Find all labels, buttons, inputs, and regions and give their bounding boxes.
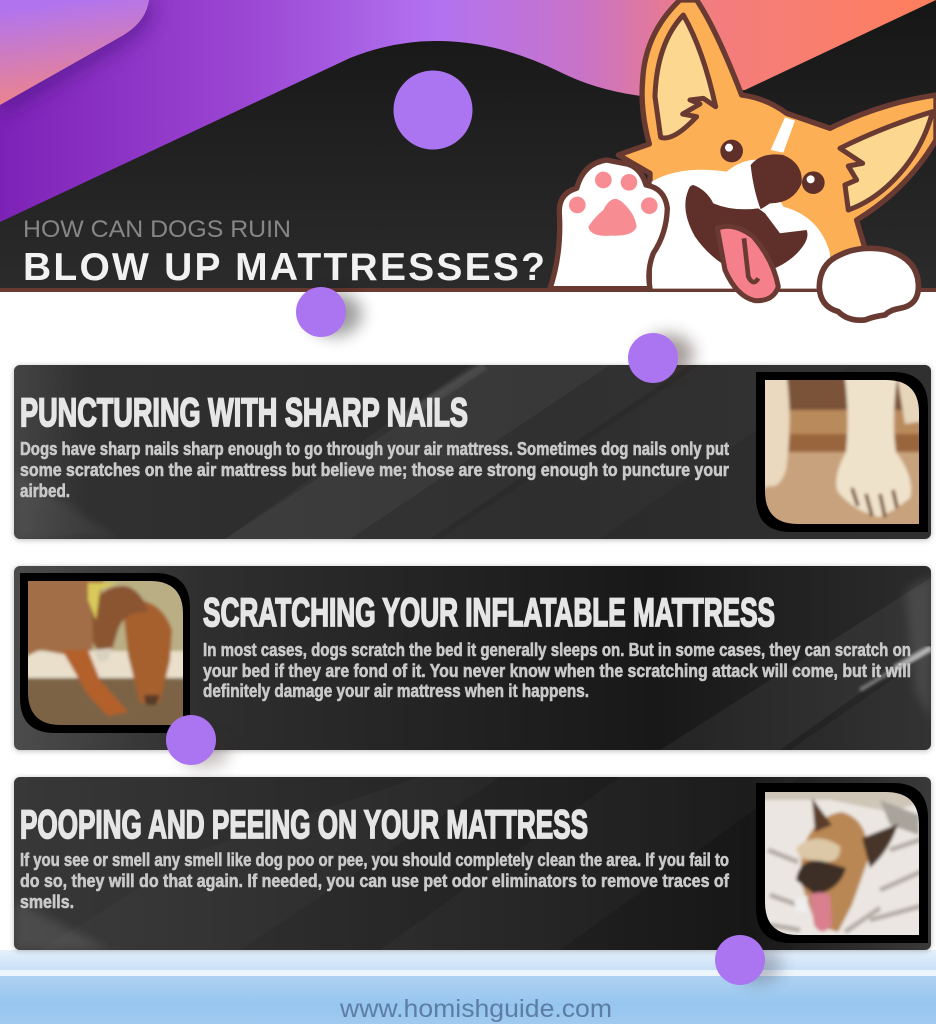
header banner bbox=[0, 0, 936, 292]
footer band bbox=[0, 950, 936, 1024]
corgi mouth bbox=[685, 185, 807, 277]
corgi left ear bbox=[655, 15, 716, 138]
body text: do so, they will do that again. If needed, you can use pet odor eliminators to remove traces of bbox=[20, 871, 730, 891]
body text: Dogs have sharp nails sharp enough to go through your air mattress. Sometimes dog nails only put bbox=[20, 439, 729, 459]
purple dot: under title bbox=[296, 287, 362, 337]
panel: pooping and peeing on your mattress bbox=[14, 777, 931, 951]
corgi right ear bbox=[840, 112, 933, 210]
corner gradient ribbon bbox=[0, 0, 149, 105]
title: BLOW UP MATTRESSES? bbox=[23, 246, 545, 289]
body text: airbed. bbox=[20, 481, 70, 501]
panel: puncturing with sharp nails bbox=[14, 365, 931, 540]
corgi raised paw bbox=[550, 160, 667, 289]
heading: POOPING AND PEEING ON YOUR MATTRESS bbox=[20, 803, 588, 847]
heading: PUNCTURING WITH SHARP NAILS bbox=[20, 391, 468, 435]
corgi muzzle bbox=[652, 160, 830, 289]
dark mountain shape bbox=[0, 0, 936, 290]
corgi tongue bbox=[717, 226, 778, 301]
corgi resting paw bbox=[819, 248, 918, 320]
body text: some scratches on the air mattress but believe me; those are strong enough to puncture your bbox=[20, 460, 729, 480]
body text: If you see or smell any smell like dog poo or pee, you should completely clean the area. If you fail to bbox=[20, 850, 729, 870]
purple dot: panel one top bbox=[628, 333, 694, 383]
corgi nose bbox=[751, 154, 802, 209]
website url: www.homishguide.com bbox=[339, 995, 612, 1023]
header text bbox=[23, 216, 545, 289]
photo: dog paws on wood floor bbox=[755, 370, 930, 537]
body text: definitely damage your air mattress when it happens. bbox=[203, 681, 589, 701]
corgi eyes bbox=[720, 140, 825, 194]
body text: smells. bbox=[20, 892, 74, 912]
white blaze bbox=[771, 117, 795, 153]
icon: corgi mascot bbox=[550, 0, 936, 320]
purple dot: panel two bottom bbox=[166, 715, 229, 768]
paw pads bbox=[569, 172, 658, 236]
purple dot: panel three bottom bbox=[715, 935, 782, 985]
photo: dachshund digging bbox=[18, 571, 193, 738]
brown base line bbox=[0, 288, 936, 292]
corgi head bbox=[618, 0, 936, 289]
panel: scratching your inflatable mattress bbox=[14, 566, 935, 751]
purple dot: header bbox=[394, 70, 472, 150]
subtitle: HOW CAN DOGS RUIN bbox=[23, 216, 291, 243]
photo: dog covering eye with paw bbox=[755, 782, 930, 947]
ribbon shadow bbox=[0, 0, 155, 118]
